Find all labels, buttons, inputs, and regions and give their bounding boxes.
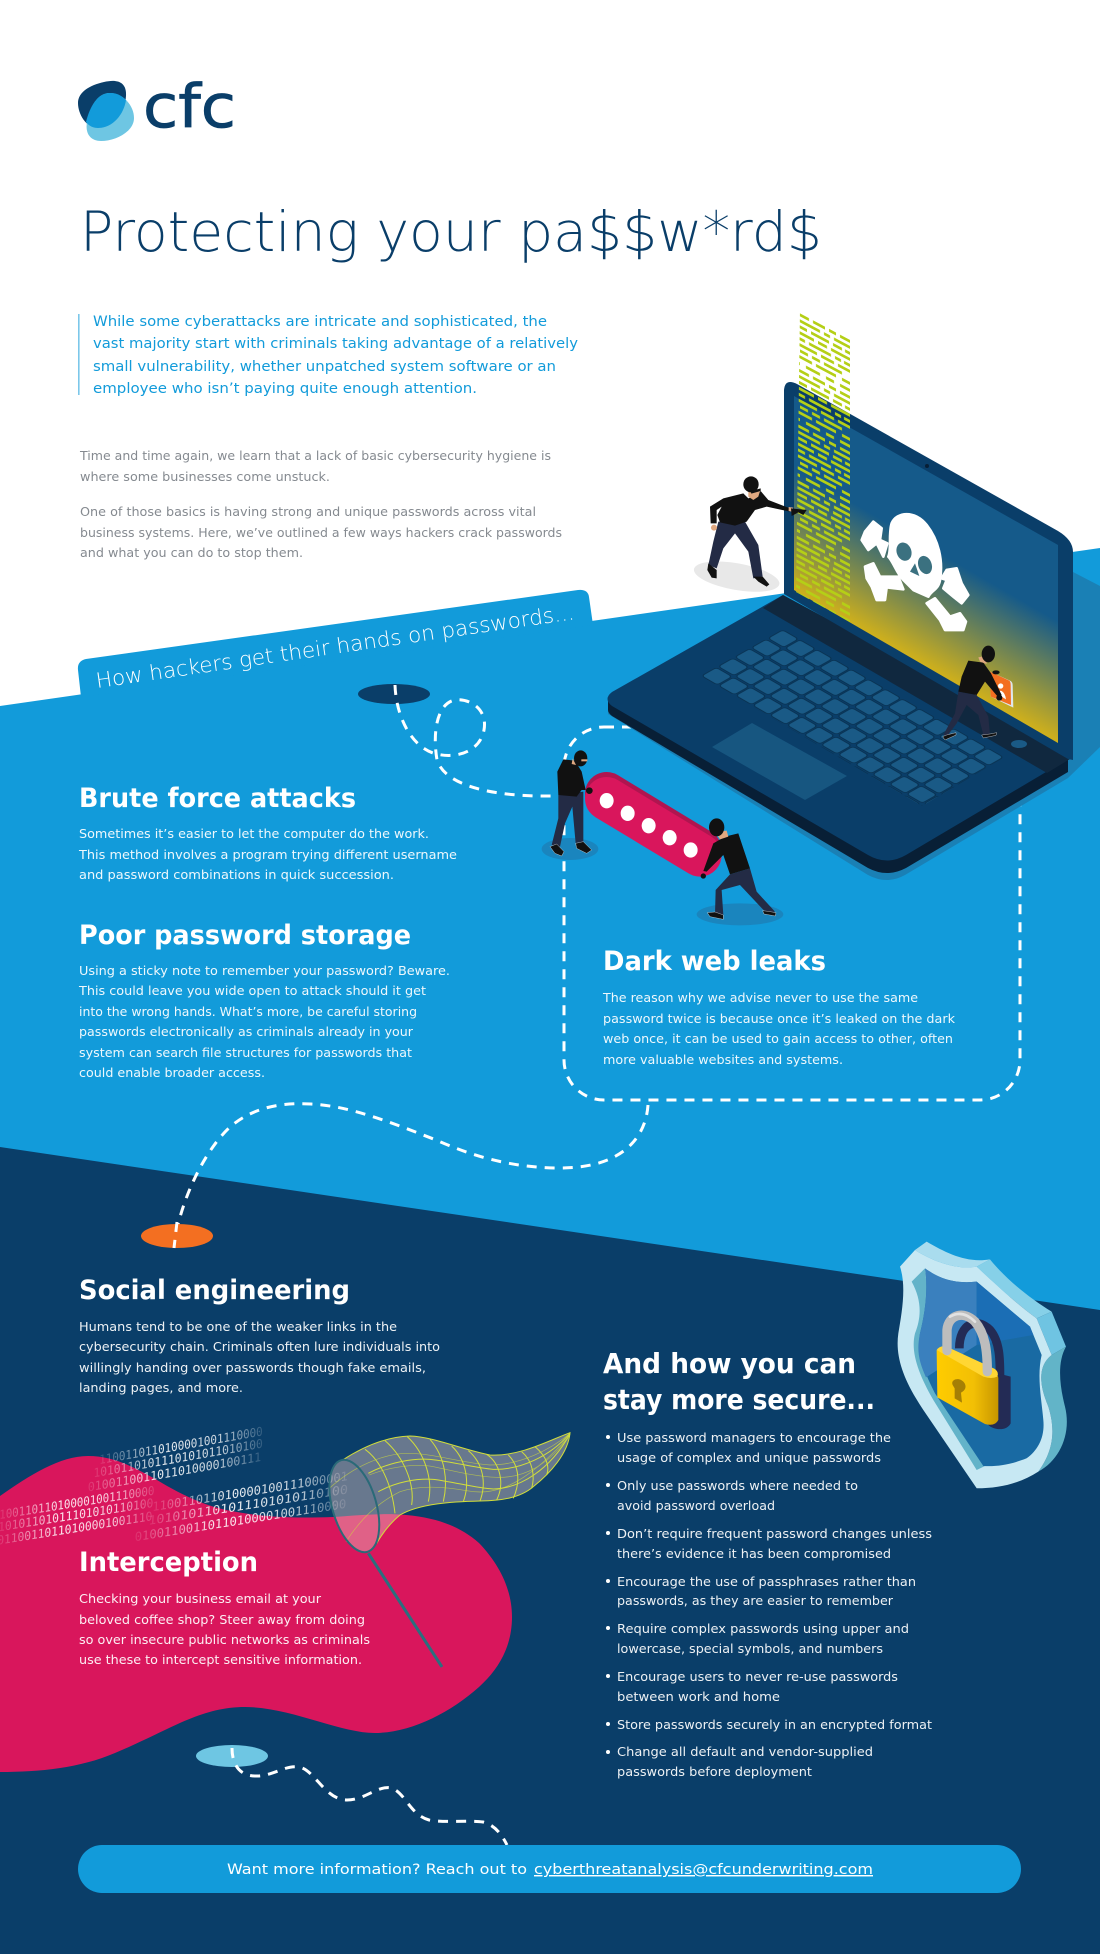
section: poor password storage: into the wrong hands. What’s more, be careful storing bbox=[79, 1004, 417, 1019]
section: dark web leaks: The reason why we advise never to use the same bbox=[602, 990, 918, 1005]
body text: introduction bbox=[79, 448, 562, 560]
illustration: butterfly net bbox=[320, 1433, 570, 1667]
section: poor password storage bbox=[78, 920, 450, 1080]
logo: cfc bbox=[78, 72, 236, 142]
hacker: carrying profile icon bbox=[943, 646, 1013, 740]
hole: navy bbox=[358, 684, 430, 704]
laptop shadow bbox=[608, 572, 1100, 880]
binary stream: centre: 110011011010000100111000001 bbox=[151, 1469, 349, 1514]
bullet list: Require complex passwords using upper and bbox=[617, 1621, 909, 1636]
section: brute force attacks: and password combinations in quick succession. bbox=[79, 867, 394, 882]
background band: light blue bbox=[0, 548, 1100, 1320]
intro callout: While some cyberattacks are intricate and sophisticated, the bbox=[93, 314, 547, 330]
bullet list: Only use passwords where needed to bbox=[617, 1478, 858, 1493]
call to action button: cyberthreatanalysis@cfcunderwriting.com bbox=[534, 1862, 873, 1878]
bullet list: passwords, as they are easier to remember bbox=[617, 1593, 894, 1608]
section: brute force attacks: Sometimes it’s easier to let the computer do the work. bbox=[79, 826, 429, 841]
section: dark web leaks: Dark web leaks bbox=[603, 946, 826, 977]
net mesh bbox=[329, 1433, 570, 1543]
body text: introduction: business systems. Here, we’ve outlined a few ways hackers crack passwords bbox=[80, 525, 562, 540]
section: interception bbox=[79, 1547, 370, 1667]
section: social engineering: willingly handing over passwords though fake emails, bbox=[79, 1360, 426, 1375]
shadow: right hacker bbox=[697, 903, 783, 925]
bullet list: Use password managers to encourage the bbox=[617, 1430, 891, 1445]
bullet list: between work and home bbox=[617, 1689, 780, 1704]
left hacker bbox=[550, 750, 593, 856]
section: interception: use these to intercept sensitive information. bbox=[79, 1652, 362, 1667]
bullet list bbox=[606, 1430, 932, 1779]
bullet list: passwords before deployment bbox=[617, 1764, 812, 1779]
dashed path: hole to call to action bbox=[232, 1748, 507, 1845]
call to action button: Want more information? Reach out to bbox=[227, 1862, 527, 1878]
section: how you can stay more secure bbox=[603, 1347, 932, 1779]
section: poor password storage: passwords electronically as criminals already in your bbox=[79, 1024, 414, 1039]
shield face bbox=[898, 1250, 1052, 1488]
bullet list: Encourage the use of passphrases rather than bbox=[617, 1574, 916, 1589]
dashed box: dark web leaks bbox=[564, 727, 1020, 1100]
call to action button bbox=[78, 1845, 1021, 1893]
hole: orange bbox=[141, 1224, 213, 1248]
section: interception: Checking your business email at your bbox=[79, 1591, 322, 1606]
background band: dark navy bbox=[0, 1147, 1100, 1954]
binary stream: left: 10101101011101010110100 bbox=[0, 1496, 154, 1534]
dashed path: hole to brute force bbox=[395, 685, 553, 796]
icon: shield and padlock bbox=[898, 1242, 1067, 1488]
section: brute force attacks: This method involves a program trying different username bbox=[78, 847, 457, 862]
section: interception: so over insecure public networks as criminals bbox=[79, 1632, 370, 1647]
section: social engineering bbox=[79, 1275, 440, 1395]
section: social engineering: Humans tend to be one of the weaker links in the bbox=[79, 1319, 397, 1334]
section: interception: Interception bbox=[79, 1547, 258, 1578]
laptop base bbox=[608, 595, 1070, 873]
bullet list: avoid password overload bbox=[617, 1498, 775, 1513]
intro callout: vast majority start with criminals taking advantage of a relatively bbox=[93, 336, 578, 352]
hacker: pointing at the code bbox=[692, 476, 807, 597]
intro callout: small vulnerability, whether unpatched system software or an bbox=[93, 359, 556, 375]
binary stream: centre: 01001100110110100001001110000 bbox=[134, 1497, 347, 1544]
bullet list: Encourage users to never re-use passwords bbox=[617, 1669, 898, 1684]
title: Protecting your pa$$w*rd$ bbox=[80, 200, 822, 264]
binary data streams bbox=[0, 1424, 353, 1548]
section: dark web leaks: password twice is because once it’s leaked on the dark bbox=[603, 1011, 956, 1026]
binary stream: left: 100110110100001001110000 bbox=[0, 1484, 156, 1522]
binary stream: upper: 1010110101110101011010100 bbox=[92, 1437, 264, 1480]
section: poor password storage: Using a sticky note to remember your password? Beware. bbox=[79, 963, 450, 978]
password bar bbox=[600, 793, 700, 858]
bullet list: lowercase, special symbols, and numbers bbox=[617, 1641, 883, 1656]
section: dark web leaks: web once, it can be used to gain access to other, often bbox=[603, 1031, 953, 1046]
body text: introduction: where some businesses come unstuck. bbox=[80, 469, 330, 484]
section: interception: beloved coffee shop? Steer away from doing bbox=[79, 1612, 365, 1627]
section: poor password storage: This could leave you wide open to attack should it get bbox=[78, 983, 426, 998]
logo: cfc: cfc bbox=[143, 72, 236, 142]
padlock bbox=[937, 1314, 1011, 1429]
illustration: hackers carrying password bar bbox=[542, 750, 783, 925]
section: social engineering: Social engineering bbox=[79, 1275, 350, 1306]
dashed segment across orange hole bbox=[174, 1222, 177, 1248]
net body bbox=[320, 1433, 570, 1558]
bullet list: Store passwords securely in an encrypted format bbox=[617, 1717, 932, 1732]
net handle bbox=[368, 1553, 442, 1667]
hole: light blue bbox=[196, 1745, 268, 1767]
section: dark web leaks bbox=[602, 946, 956, 1067]
section: poor password storage: system can search file structures for passwords that bbox=[79, 1045, 412, 1060]
binary stream: centre: 1010101101011101010110100 bbox=[147, 1482, 349, 1528]
body text: introduction: Time and time again, we learn that a lack of basic cybersecurity hygiene is bbox=[79, 448, 551, 463]
binary stream: left: 01100110110100001001110 bbox=[0, 1509, 154, 1548]
dashed path: dark web to social engineering bbox=[174, 1104, 648, 1246]
net hoop bbox=[320, 1454, 389, 1558]
bullet list: Change all default and vendor-supplied bbox=[617, 1744, 873, 1759]
icon: skull and crossbones bbox=[862, 514, 968, 630]
code column bbox=[796, 313, 850, 622]
shield depth bbox=[915, 1242, 1067, 1472]
body text: introduction: One of those basics is having strong and unique passwords across vital bbox=[80, 504, 536, 519]
section: brute force attacks: Brute force attacks bbox=[79, 783, 356, 814]
heading bbox=[603, 1347, 875, 1416]
intro callout bbox=[78, 314, 578, 397]
binary stream: upper: 0100110011011010000100111 bbox=[87, 1450, 262, 1494]
heading: And how you can bbox=[603, 1347, 856, 1380]
shield inner panels bbox=[918, 1268, 1044, 1466]
section: social engineering: cybersecurity chain. Criminals often lure individuals into bbox=[79, 1339, 440, 1354]
binary stream: upper: 1100110110100001001110000 bbox=[98, 1424, 264, 1467]
binary stream: left bbox=[0, 1484, 159, 1548]
tab: how hackers: How hackers get their hands on passwords... bbox=[94, 600, 576, 693]
section: brute force attacks bbox=[78, 783, 457, 882]
bullet list: there’s evidence it has been compromised bbox=[617, 1546, 891, 1561]
body text: introduction: and what you can do to stop them. bbox=[80, 545, 303, 560]
section: poor password storage: Poor password storage bbox=[79, 920, 411, 951]
pink blob bbox=[0, 1456, 512, 1772]
section: social engineering: landing pages, and more. bbox=[79, 1380, 243, 1395]
section: dark web leaks: more valuable websites and systems. bbox=[603, 1052, 843, 1067]
shield inner left wall bbox=[912, 1268, 985, 1470]
binary stream: upper bbox=[82, 1424, 268, 1494]
bullet list: Don’t require frequent password changes unless bbox=[617, 1526, 932, 1541]
bullet list: usage of complex and unique passwords bbox=[617, 1450, 881, 1465]
right hacker bbox=[701, 818, 776, 919]
heading: stay more secure... bbox=[603, 1383, 875, 1416]
laptop screen bbox=[784, 382, 1073, 760]
illustration: laptop bbox=[608, 300, 1100, 880]
binary stream: centre bbox=[130, 1469, 353, 1544]
section: poor password storage: could enable broader access. bbox=[79, 1065, 265, 1080]
shadow: left hacker bbox=[542, 838, 598, 860]
intro callout: employee who isn’t paying quite enough attention. bbox=[93, 381, 477, 397]
